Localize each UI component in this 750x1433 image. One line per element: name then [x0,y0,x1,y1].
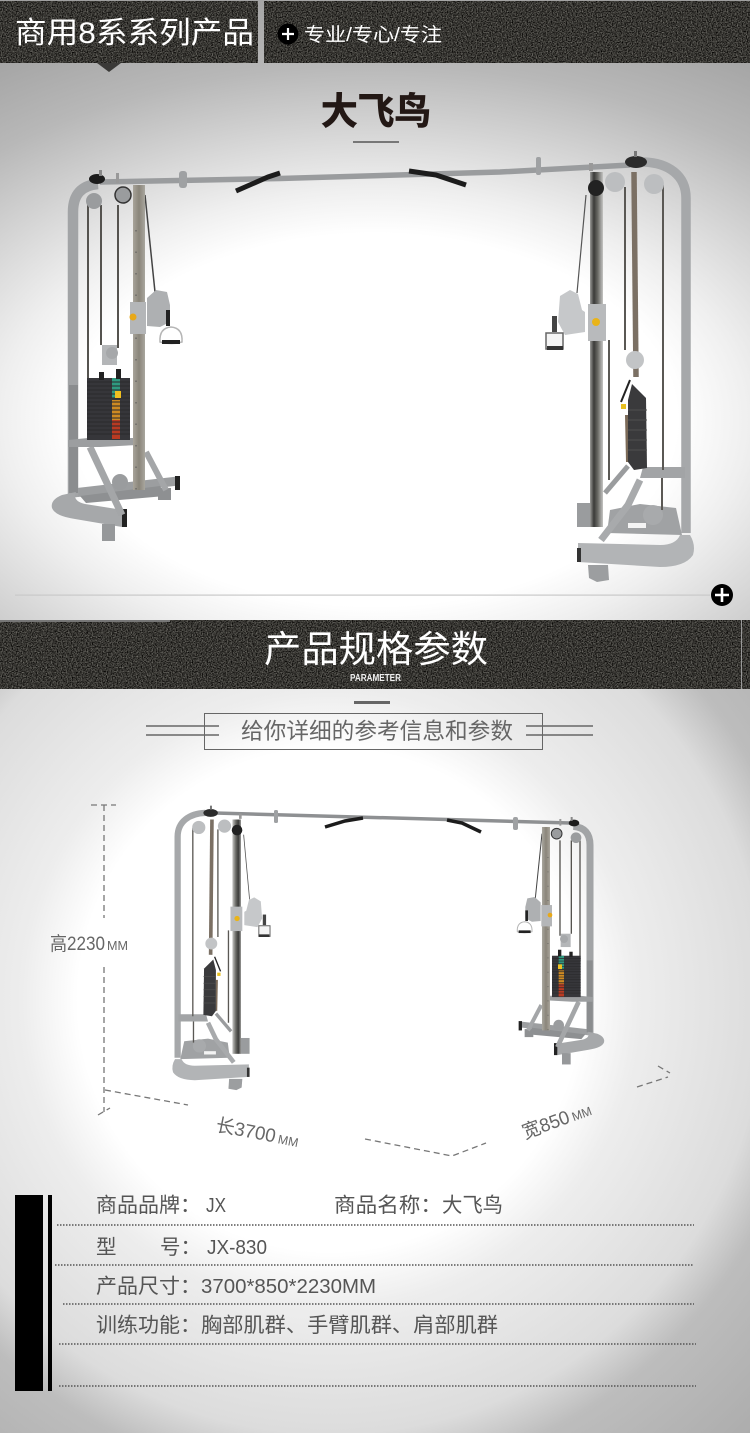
header bar: slogan: 专业/专心/专注 [304,24,442,46]
banner: product specifications: 产品规格参数 [264,629,488,670]
function: 胸部肌群、手臂肌群、肩部肌群 [201,1314,498,1337]
size: 产品尺寸： [96,1275,201,1298]
banner: product specifications: PARAMETER [350,672,401,684]
banner: product specifications [0,620,750,689]
lower right tower [517,817,604,1064]
height label: MM [107,939,128,953]
left pull-up grip [236,173,280,191]
divider line with plus [15,584,733,606]
model: 号： [160,1236,201,1259]
width label: 宽850MM [519,1098,594,1144]
black side bars [15,1195,52,1391]
height label: 高2230 [50,933,105,955]
name [334,1194,503,1217]
dimension lines [91,805,670,1156]
subtitle box: 给你详细的参考信息和参数 [241,719,513,744]
title underline [353,141,399,143]
header bar: slogan [264,1,750,63]
background: lower parameter panel [0,689,750,1433]
model: JX-830 [207,1236,267,1259]
brand: JX [206,1194,226,1217]
spec table text [96,1194,503,1337]
size [96,1275,376,1298]
top crossbar [100,165,630,182]
lower crossbar [215,813,570,823]
cable machine: dimensioned product photo [172,806,604,1090]
length label: 长3700MM [214,1114,301,1152]
brand: 商品品牌： [96,1194,201,1217]
lower collars [274,810,518,830]
lower left grip [325,818,363,827]
model: 型 [96,1236,116,1259]
model [96,1236,267,1259]
crossbar collars [179,157,541,188]
product title: 大飞鸟 [321,91,431,132]
cable machine: main product photo [52,151,694,582]
left tower [52,170,182,541]
lower right grip [447,820,481,832]
subtitle box [146,714,593,750]
function: 训练功能： [96,1314,201,1337]
right tower [546,151,694,582]
name: 大飞鸟 [442,1194,503,1217]
header tab: series name: 商用8系系列产品 [15,17,254,50]
header tab: series name [0,1,258,72]
size: 3700*850*2230MM [201,1275,376,1298]
name: 商品名称： [334,1194,442,1217]
spec rows dotted lines [55,1225,696,1386]
background: upper product panel [0,0,750,620]
lower left tower [172,806,270,1090]
short rule [354,701,390,704]
right pull-up grip [409,171,466,185]
